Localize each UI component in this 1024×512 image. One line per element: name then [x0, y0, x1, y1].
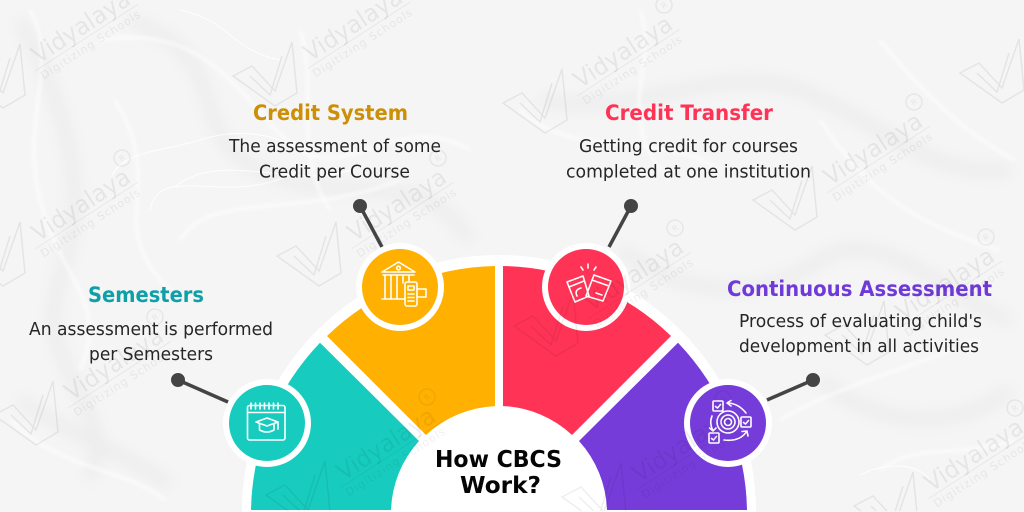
watermark: top left: Digitizing Schools: [38, 8, 143, 82]
watermark: middle left: Vidyalaya: [26, 163, 136, 247]
watermark: middle centre left: R: [433, 153, 443, 164]
text block: credit system: Credit System: [253, 101, 408, 125]
connector: semesters: [171, 373, 228, 402]
watermark: middle centre right: Vidyalaya: [579, 233, 689, 317]
icon: calendar with graduation cap: [223, 379, 311, 467]
watermark: lower left: [0, 306, 186, 445]
watermark: middle right: [825, 226, 1017, 365]
segment: continuous assessment: [579, 343, 747, 510]
segment: semesters: [251, 343, 419, 510]
watermark: lower right: R: [1010, 403, 1020, 414]
watermark: top centre right: Digitizing Schools: [580, 33, 685, 107]
watermark: on teal segment: Vidyalaya: [331, 402, 441, 486]
watermark: on teal segment: [266, 386, 458, 511]
icon: exchanged credit cards: [542, 243, 630, 331]
title: how cbcs work: How CBCS: [435, 447, 562, 473]
watermark: far right logo: [960, 39, 1024, 103]
segment: credit transfer: [503, 266, 671, 435]
watermark: top centre right: [503, 0, 695, 133]
segment: credit system: [327, 266, 495, 435]
watermark: upper right: [753, 91, 945, 230]
text block: semesters: [29, 283, 273, 365]
connector: continuous assessment: [767, 373, 820, 400]
watermark: upper right: Vidyalaya: [818, 107, 928, 191]
text block: credit transfer: completed at one institution: [566, 162, 811, 182]
watermark: upper right: R: [909, 97, 919, 108]
watermark: top centre right: Vidyalaya: [568, 10, 678, 94]
watermark: top centre right: R: [659, 0, 669, 11]
watermark: on teal segment: R: [422, 392, 432, 403]
watermark: middle centre right: R: [670, 223, 680, 234]
watermark: on purple segment: Vidyalaya: [627, 404, 737, 488]
text block: credit transfer: Getting credit for courses: [579, 137, 798, 157]
watermark: upper right: Digitizing Schools: [830, 130, 935, 204]
text block: semesters: per Semesters: [89, 345, 213, 365]
watermark: middle centre right: [514, 217, 706, 356]
watermark: top centre left: Digitizing Schools: [310, 6, 415, 80]
text block: credit system: Credit per Course: [259, 162, 410, 182]
text block: credit system: [228, 101, 441, 182]
watermark: middle left: R: [117, 153, 127, 164]
watermark: lower left: Vidyalaya: [59, 322, 169, 406]
text block: credit transfer: Credit Transfer: [605, 101, 774, 125]
text block: semesters: An assessment is performed: [29, 320, 273, 340]
watermark: on teal segment: Digitizing Schools: [343, 425, 448, 499]
watermark: on purple segment: Digitizing Schools: [639, 427, 744, 501]
watermark: lower left: Digitizing Schools: [71, 345, 176, 419]
watermark: middle right: Digitizing Schools: [902, 265, 1007, 339]
watermark: lower right: [854, 397, 1024, 511]
watermark: top left: [0, 0, 153, 108]
watermark: lower left: R: [150, 312, 160, 323]
watermark: middle centre left: Vidyalaya: [342, 163, 452, 247]
connector: credit system: [353, 199, 382, 247]
icon: continuous assessment cycle: [684, 379, 772, 467]
connector: credit transfer: [609, 199, 638, 247]
watermark: middle centre left: Digitizing Schools: [354, 186, 459, 260]
text block: continuous assessment: development in all activities: [739, 337, 979, 357]
text block: continuous assessment: [727, 277, 992, 357]
watermark: on purple segment: [562, 388, 754, 511]
watermark: middle left: Digitizing Schools: [38, 186, 143, 260]
watermark: top centre left: [233, 0, 425, 106]
watermark: middle right: R: [981, 232, 991, 243]
text block: semesters: Semesters: [88, 283, 204, 307]
watermark: middle centre left: [277, 147, 469, 286]
watermark: middle left: [0, 147, 153, 286]
watermark: middle centre right: Digitizing Schools: [591, 256, 696, 330]
title: how cbcs work: [435, 447, 562, 499]
title: how cbcs work: Work?: [460, 473, 541, 499]
text block: credit transfer: [566, 101, 811, 182]
text block: continuous assessment: Continuous Assessment: [727, 277, 992, 301]
white halo behind the semicircle: [242, 255, 756, 512]
text block: credit system: The assessment of some: [228, 137, 441, 157]
icon: bank and card machine: [356, 243, 444, 331]
text block: continuous assessment: Process of evaluating child's: [739, 312, 982, 332]
watermark: middle right: Vidyalaya: [890, 242, 1000, 326]
watermark: on purple segment: R: [718, 394, 728, 405]
